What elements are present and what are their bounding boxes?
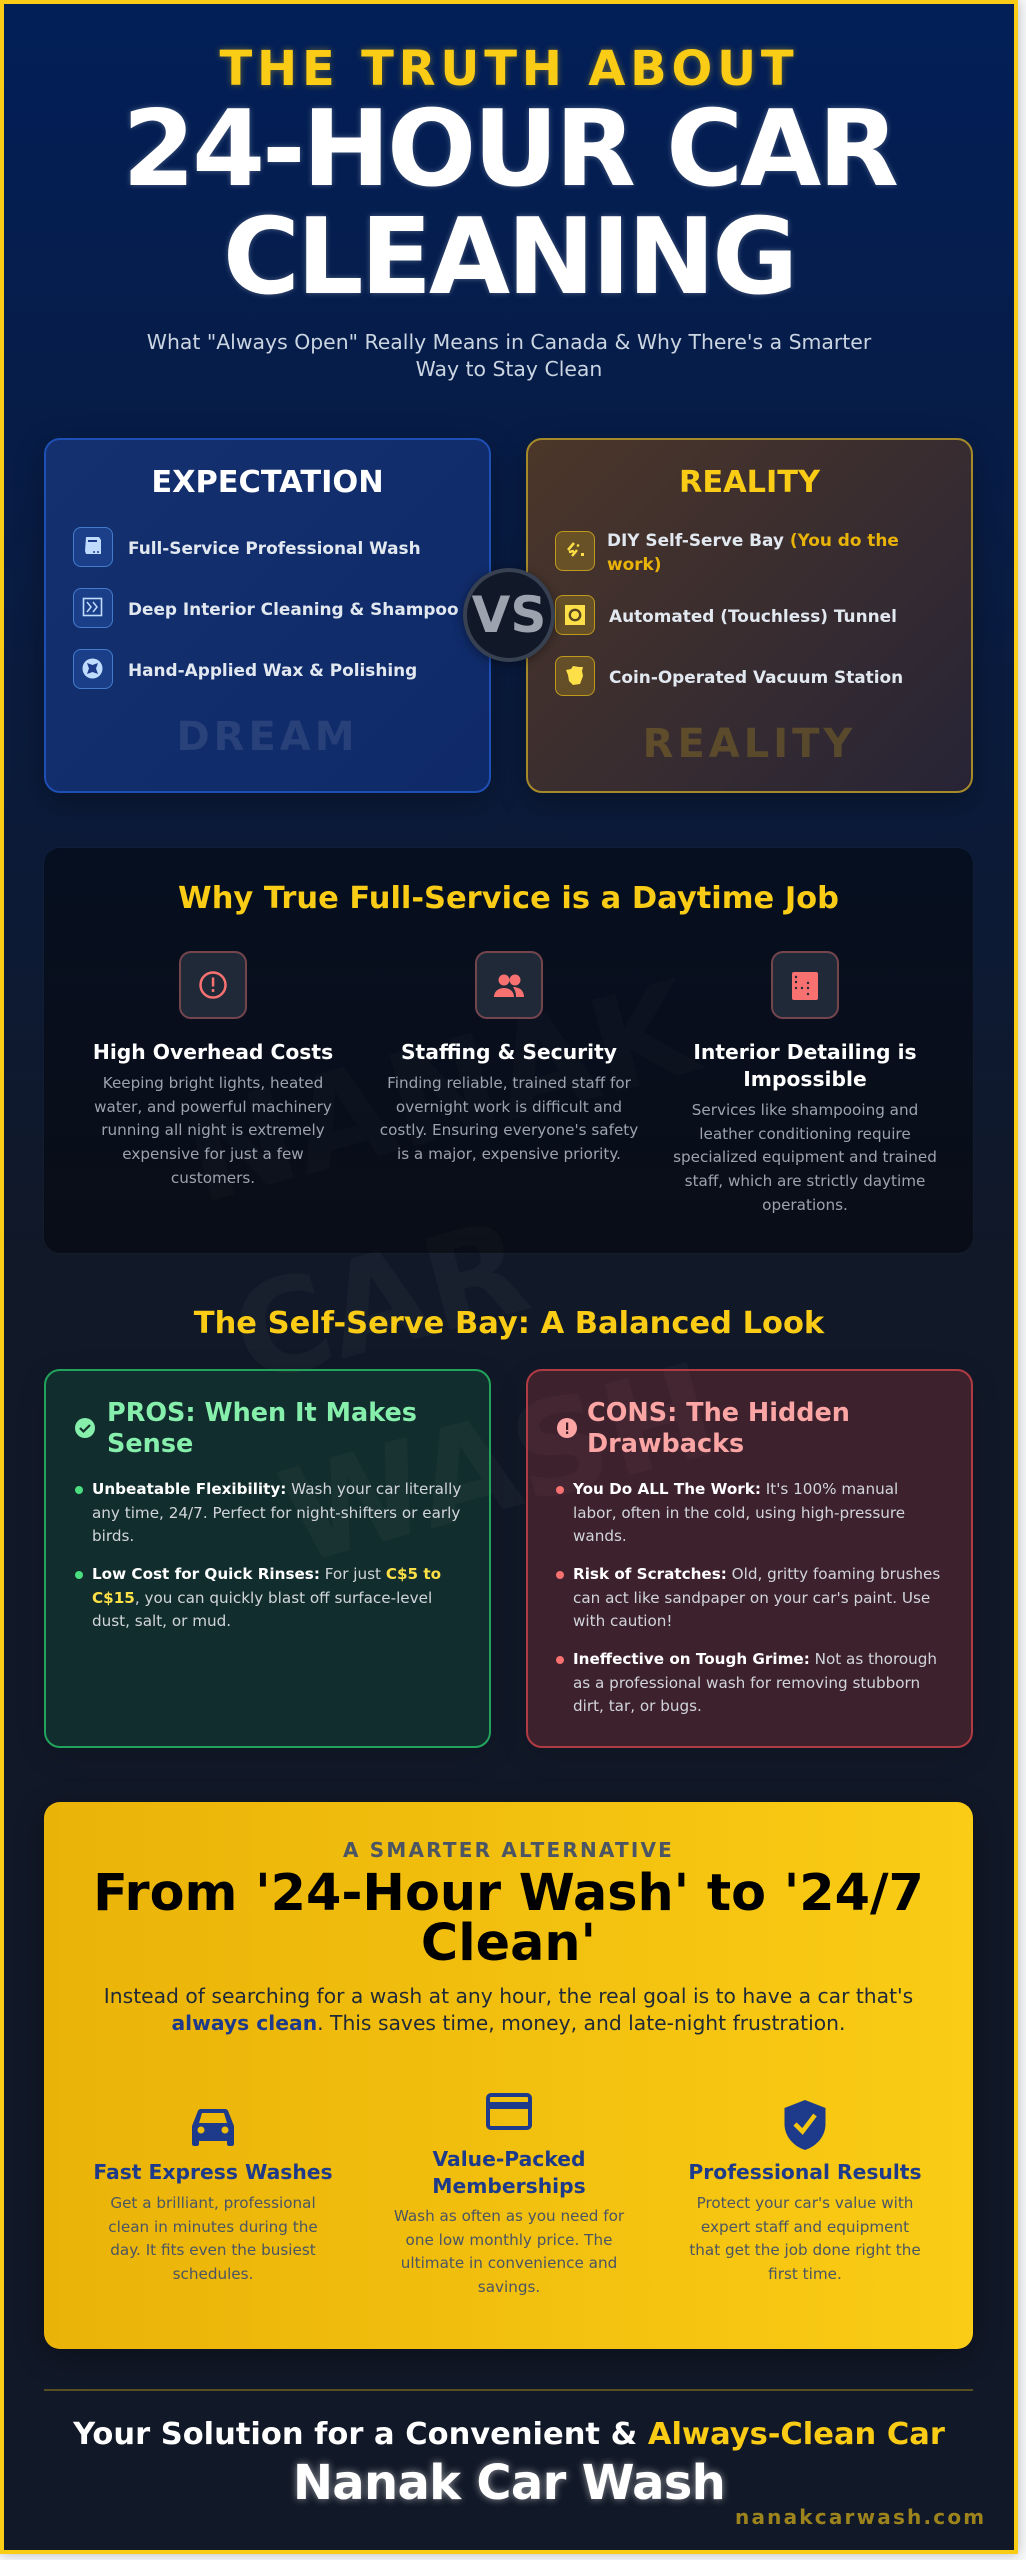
- text: You Do ALL The Work: It's 100% manual: [573, 1480, 898, 1498]
- column: interior: [673, 951, 937, 1214]
- icon: vacuum: [555, 656, 595, 696]
- description: clean in minutes during the: [108, 2218, 318, 2236]
- text: [572, 1480, 905, 1545]
- heading: pros: PROS: When It Makes: [107, 1398, 417, 1428]
- text: labor, often in the cold, using high-pressure: [573, 1504, 905, 1522]
- heading: why: Why True Full-Service is a Daytime Job: [178, 881, 839, 916]
- icon: warning: [179, 951, 247, 1019]
- list item: flexibility: [75, 1480, 461, 1545]
- text: [573, 1650, 937, 1715]
- title: From '24-Hour Wash' to '24/7: [93, 1863, 924, 1922]
- text: C$15, you can quickly blast off surface-level: [92, 1589, 432, 1607]
- subtitle: [147, 330, 872, 381]
- title: [93, 1863, 924, 1972]
- heading: pros: Sense: [107, 1428, 193, 1458]
- text: diy bay: DIY Self-Serve Bay (You do the: [607, 530, 899, 550]
- title: Professional Results: [688, 2160, 922, 2184]
- column: fast express: [93, 2109, 333, 2283]
- background watermark: Nanak Car Wash: [165, 889, 986, 1612]
- description: [689, 2194, 921, 2283]
- panel: cons: [526, 1369, 973, 1748]
- text: with caution!: [573, 1612, 673, 1630]
- icon: tunnel: [555, 595, 595, 635]
- text: Risk of Scratches: Old, gritty foaming brushes: [573, 1565, 940, 1583]
- icon: car: [192, 2109, 234, 2146]
- title: [693, 1040, 917, 1091]
- background watermark: Nanak Car Wash: NANAK: [169, 952, 710, 1233]
- footer divider: [44, 2389, 973, 2391]
- list item: low cost: [75, 1565, 441, 1630]
- description: Get a brilliant, professional: [110, 2194, 316, 2212]
- description: customers.: [171, 1169, 255, 1187]
- eyebrow: A SMARTER ALTERNATIVE: [343, 1838, 674, 1862]
- description: [394, 2207, 624, 2296]
- description: first time.: [768, 2265, 842, 2283]
- text: Ineffective on Tough Grime: Not as thorough: [573, 1650, 937, 1668]
- background watermark: Nanak Car Wash: CAR: [217, 1190, 543, 1414]
- description: day. It fits even the busiest: [110, 2241, 316, 2259]
- heading: cons: Drawbacks: [587, 1428, 744, 1458]
- footer: [72, 2417, 986, 2529]
- panel: pros: [44, 1369, 491, 1748]
- vs badge: VS: [472, 586, 546, 644]
- description: [673, 1101, 937, 1214]
- panel: reality: [526, 438, 973, 793]
- text: [92, 1480, 461, 1545]
- main title: [122, 88, 898, 318]
- description: [94, 1074, 332, 1187]
- title: Interior Detailing is: [693, 1040, 917, 1064]
- title: Clean': [421, 1913, 596, 1972]
- text: dust, salt, or mud.: [92, 1612, 231, 1630]
- heading: reality: REALITY: [679, 465, 820, 500]
- description: overnight work is difficult and: [396, 1098, 622, 1116]
- description: specialized equipment and trained: [673, 1148, 937, 1166]
- description: savings.: [478, 2278, 540, 2296]
- description: staff, which are strictly daytime: [685, 1172, 925, 1190]
- vs badge: [463, 568, 555, 662]
- icon: wax: [73, 649, 113, 689]
- icon: grid: [771, 951, 839, 1019]
- icon: spray: [555, 531, 595, 571]
- icon: interior: [73, 588, 113, 628]
- text: can act like sandpaper on your car's paint. Use: [573, 1589, 930, 1607]
- text: Unbeatable Flexibility: Wash your car literally: [92, 1480, 461, 1498]
- description: Protect your car's value with: [697, 2194, 913, 2212]
- bullet: [75, 1486, 83, 1494]
- paragraph: Instead of searching for a wash at any hour, the real goal is to have a car that's: [104, 1984, 913, 2008]
- heading: cons: CONS: The Hidden: [587, 1398, 850, 1428]
- brand name: Nanak Car Wash: [293, 2455, 725, 2511]
- heading: pros: [107, 1398, 417, 1458]
- bullet: [556, 1571, 564, 1579]
- paragraph: [104, 1984, 913, 2034]
- text: diy bay: work): [607, 554, 662, 574]
- column: memberships: [394, 2093, 624, 2296]
- icon: alert: [557, 1418, 577, 1438]
- list item: tough grime: [556, 1650, 937, 1715]
- description: ultimate in convenience and: [401, 2254, 617, 2272]
- description: schedules.: [173, 2265, 253, 2283]
- title: [432, 2147, 586, 2198]
- text: [573, 1565, 940, 1630]
- text: deep interior: Deep Interior Cleaning & Shampoo: [128, 598, 459, 618]
- description: expensive for just a few: [122, 1145, 304, 1163]
- panel: smarter alternative: [44, 1802, 973, 2349]
- heading: expectation: EXPECTATION: [151, 465, 384, 500]
- bullet: [556, 1656, 564, 1664]
- panel: expectation: [44, 438, 491, 793]
- heading: self-serve bay: The Self-Serve Bay: A Balanced Look: [194, 1306, 824, 1341]
- icon: shield: [784, 2100, 826, 2150]
- heading: cons: [587, 1398, 850, 1458]
- icon: check: [75, 1418, 95, 1438]
- eyebrow: The Truth About: THE TRUTH ABOUT: [220, 41, 798, 97]
- bullet: [556, 1486, 564, 1494]
- header: [122, 41, 898, 381]
- description: operations.: [762, 1196, 848, 1214]
- column: professional results: [688, 2100, 922, 2283]
- list item: scratches: [556, 1565, 940, 1630]
- text: wands.: [573, 1527, 627, 1545]
- bullet: [75, 1571, 83, 1579]
- paragraph: always clean. This saves time, money, and late-night frustration.: [172, 2010, 845, 2034]
- main title: CLEANING: [223, 196, 795, 318]
- text: vacuum: Coin-Operated Vacuum Station: [609, 666, 903, 686]
- description: [108, 2194, 318, 2283]
- text: any time, 24/7. Perfect for night-shifters or early: [92, 1504, 460, 1522]
- tagline: Your Solution for a Convenient & Always-Clean Car: [73, 2417, 945, 2452]
- description: running all night is extremely: [101, 1121, 325, 1139]
- text: tunnel: Automated (Touchless) Tunnel: [609, 606, 897, 626]
- description: is a major, expensive priority.: [397, 1145, 621, 1163]
- list item: manual work: [556, 1480, 905, 1545]
- text: hand wax: Hand-Applied Wax & Polishing: [128, 660, 417, 680]
- panel: why full-service is a daytime job: [44, 848, 973, 1253]
- title: Staffing & Security: [401, 1040, 617, 1064]
- description: Wash as often as you need for: [394, 2207, 624, 2225]
- title: Memberships: [432, 2174, 586, 2198]
- subtitle: Way to Stay Clean: [416, 357, 602, 381]
- text: diy bay: [607, 530, 899, 574]
- column: staffing: [380, 951, 638, 1163]
- title: High Overhead Costs: [93, 1040, 333, 1064]
- watermark: dream: DREAM: [176, 714, 359, 760]
- description: Services like shampooing and: [692, 1101, 918, 1119]
- icon: people: [475, 951, 543, 1019]
- description: Keeping bright lights, heated: [103, 1074, 323, 1092]
- column: high overhead: [93, 951, 333, 1187]
- text: birds.: [92, 1527, 134, 1545]
- title: Fast Express Washes: [93, 2160, 333, 2184]
- description: Finding reliable, trained staff for: [387, 1074, 631, 1092]
- description: water, and powerful machinery: [94, 1098, 332, 1116]
- background watermark: Nanak Car Wash: WASH: [266, 1334, 731, 1594]
- title: Impossible: [743, 1067, 867, 1091]
- subtitle: What "Always Open" Really Means in Canada & Why There's a Smarter: [147, 330, 871, 354]
- website: nanakcarwash.com: [735, 2505, 986, 2529]
- title: Value-Packed: [432, 2147, 586, 2171]
- description: that get the job done right the: [689, 2241, 921, 2259]
- icon: card: [486, 2093, 532, 2130]
- watermark: reality: REALITY: [643, 721, 856, 767]
- text: as a professional wash for removing stubborn: [573, 1674, 920, 1692]
- text: [92, 1565, 441, 1630]
- description: leather conditioning require: [699, 1125, 911, 1143]
- description: [380, 1074, 638, 1163]
- description: expert staff and equipment: [701, 2218, 909, 2236]
- main title: 24-HOUR CAR: [122, 88, 896, 210]
- text: Low Cost for Quick Rinses: For just C$5 to: [92, 1565, 441, 1583]
- description: costly. Ensuring everyone's safety: [380, 1121, 638, 1139]
- text: full-service: Full-Service Professional Wash: [128, 538, 421, 558]
- text: dirt, tar, or bugs.: [573, 1697, 702, 1715]
- icon: wash machine: [73, 527, 113, 567]
- description: one low monthly price. The: [406, 2231, 612, 2249]
